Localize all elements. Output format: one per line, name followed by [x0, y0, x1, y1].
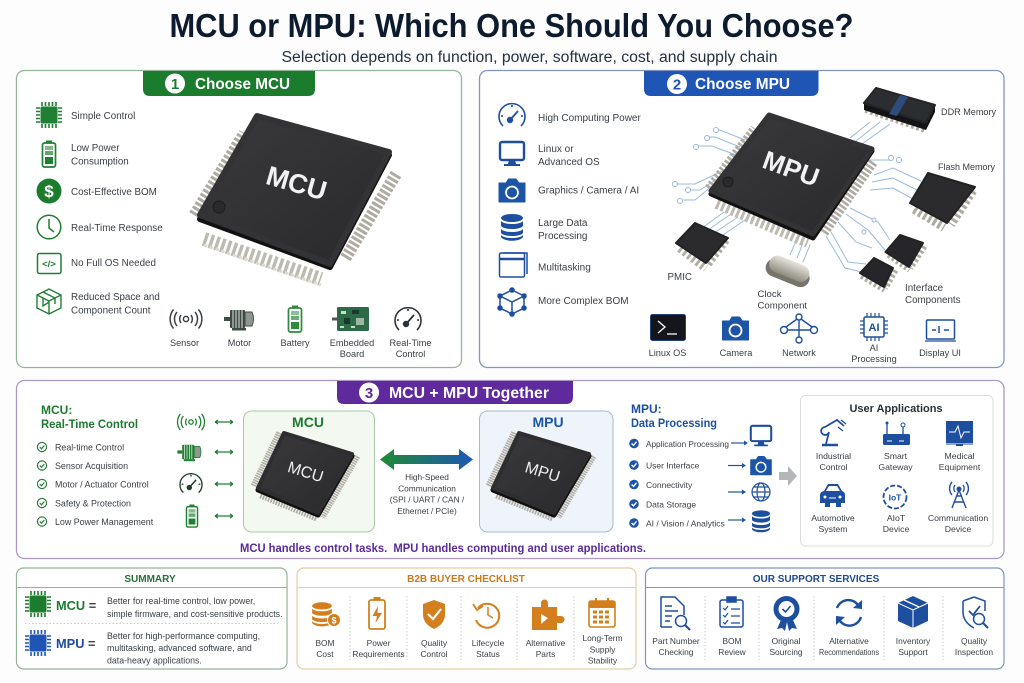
icon: original sourcing badge: [774, 596, 800, 631]
label: power requirements: Power: [367, 638, 391, 648]
label: AI processing: AI: [870, 343, 878, 353]
list: MPU tasks: Application Processing: [646, 439, 729, 449]
list: MCU tasks: Real-time Control: [55, 442, 124, 452]
text: more complex BOM: More Complex BOM: [538, 296, 629, 307]
text: large data processing: Processing: [538, 231, 587, 242]
label: flash memory: Flash Memory: [938, 162, 996, 172]
text: reduced space: Component Count: [71, 305, 151, 316]
text: large data processing: Large Data: [538, 218, 588, 229]
label: automotive system: System: [819, 524, 847, 534]
icon: database: [501, 214, 523, 241]
heading: user applications: User Applications: [849, 403, 943, 415]
panel: B2B buyer checklist: [297, 568, 636, 669]
icon: alternative parts puzzle: [532, 600, 564, 630]
chip: PMIC: [676, 223, 728, 268]
label: communication device: Device: [945, 524, 971, 534]
label: MCU equals: MCU =: [56, 598, 96, 613]
panel: summary: [16, 568, 287, 669]
chip: flash memory: [910, 173, 975, 226]
icon: network: [780, 314, 818, 343]
heading tab: together: MCU + MPU Together: [389, 385, 549, 402]
list: MCU tasks: Motor / Actuator Control: [55, 480, 149, 490]
chip: interface A: [886, 235, 924, 269]
icon: dollar: [36, 178, 62, 204]
label: AIoT device: AIoT: [887, 513, 906, 523]
icon: AI chip: [860, 313, 888, 341]
text: low power consumption: Consumption: [71, 156, 129, 167]
arrow: to applications: [779, 466, 797, 486]
icon row: MCU uses: [170, 306, 432, 359]
label: AI processing: Processing: [851, 354, 897, 364]
list: MPU tasks: Data Storage: [646, 500, 696, 510]
label: real-time control: Control: [396, 349, 425, 359]
icon: AIoT device: IoT: [889, 492, 902, 502]
text: linux or advanced OS: Advanced OS: [538, 157, 600, 168]
label: inventory support: Support: [898, 647, 928, 657]
label: real-time control: Real-Time: [389, 338, 432, 348]
label: part number checking: Checking: [659, 647, 694, 657]
icon: linux terminal: [650, 314, 686, 340]
heading: summary: SUMMARY: [124, 574, 176, 585]
icon: BOM review: [720, 597, 743, 627]
icon: power requirements: [369, 597, 385, 629]
icon: simple control chip: [36, 102, 62, 128]
heading tab: choose MCU: [143, 71, 315, 96]
heading tab: together: [337, 381, 573, 404]
icon: embedded board: [332, 307, 369, 331]
label: quality control: Quality: [421, 638, 448, 648]
label: medical equipment: Equipment: [939, 462, 981, 472]
label: DDR memory: DDR Memory: [941, 107, 997, 117]
label: smart gateway: Gateway: [878, 462, 913, 472]
icon: camera: [499, 179, 525, 202]
label: embedded board: Board: [340, 349, 364, 359]
icon: medical equipment: [946, 421, 973, 446]
label: motor: Motor: [228, 338, 251, 348]
icon: lifecycle: [473, 604, 499, 628]
icon: alternative recommendations: [836, 600, 862, 626]
icon: gauge: [395, 308, 421, 330]
icon: automotive: [820, 484, 845, 507]
label: quality control: Control: [420, 649, 448, 659]
heading tab: choose MPU: 2: [673, 76, 681, 94]
text: high-speed communication: High-Speed: [405, 472, 449, 482]
icon: sensor: [170, 310, 202, 328]
label: BOM cost: Cost: [316, 649, 334, 659]
label: part number checking: Part Number: [652, 636, 700, 646]
icon: MPU chip: [25, 630, 51, 656]
chip: clock crystal: [763, 252, 814, 290]
icon: inventory box: [898, 596, 928, 628]
text: high-speed communication: (SPI / UART / CAN /: [390, 495, 465, 505]
icon: MCU chip: [25, 591, 51, 617]
list: MCU tasks: [37, 442, 154, 527]
text: MPU summary: data-heavy applications.: [107, 655, 202, 665]
text: MPU summary: Better for high-performance computing,: [107, 631, 260, 641]
subtitle: Selection depends on function, power, software, cost, and supply chain: [282, 49, 778, 66]
icon: display UI: [925, 320, 956, 341]
text: multitasking: Multitasking: [538, 262, 591, 274]
text: MPU summary: multitasking, advanced software, and: [107, 643, 252, 653]
list: MPU tasks: Connectivity: [646, 480, 693, 490]
chip: small MCU: MCU: [285, 459, 325, 486]
heading tab: together: 3: [365, 385, 373, 402]
label: BOM review: Review: [718, 647, 747, 657]
icon: motor: [224, 310, 254, 330]
text: real-time response: Real-Time Response: [71, 223, 163, 234]
label: MPU equals: MPU =: [56, 636, 95, 651]
label: camera: Camera: [720, 348, 753, 358]
heading tab: choose MCU: Choose MCU: [195, 76, 290, 93]
icon: high computing gauge: [499, 104, 525, 126]
label: battery: Battery: [280, 338, 310, 348]
label: alternative parts: Parts: [536, 649, 555, 659]
label: AIoT device: Device: [883, 524, 909, 534]
icon: smart gateway: [883, 422, 910, 445]
list: MCU tasks: Low Power Management: [55, 517, 154, 527]
label: long-term supply stability: Stability: [588, 656, 618, 666]
label: lifecycle status: Lifecycle: [472, 638, 505, 648]
label: linux OS: Linux OS: [649, 348, 686, 358]
box: user applications: [800, 396, 993, 546]
heading: MCU real-time control: Real-Time Control: [41, 417, 138, 431]
label: display UI: Display UI: [919, 348, 961, 358]
icon: communication tower: [950, 482, 968, 508]
text: simple control: Simple Control: [71, 111, 135, 122]
label: MCU: MCU: [292, 414, 324, 430]
panel: MCU + MPU together: [16, 380, 1004, 558]
icon: BOM cost: [312, 602, 340, 626]
label: clock component: Clock: [758, 289, 782, 300]
label: BOM review: BOM: [722, 636, 742, 646]
icon: AIoT device: [884, 486, 906, 508]
icon: supply calendar: [589, 598, 615, 627]
icon: BOM cost: $: [331, 616, 337, 626]
label: MPU: MPU: [532, 414, 564, 430]
icons: MPU outputs with arrows: [728, 426, 771, 532]
icon: part number checking: [661, 597, 690, 630]
chip: DDR memory: [864, 88, 935, 130]
label: interface components: Interface: [905, 283, 944, 294]
icon: AI chip: AI: [868, 322, 880, 334]
label: industrial control: Industrial: [816, 451, 851, 461]
list: MPU tasks: [629, 439, 729, 528]
icon: monitor: [500, 142, 524, 166]
caption: control vs computing: MCU handles control tasks. MPU handles computing and user applications.: [240, 541, 646, 555]
heading: MPU data processing: MPU:: [631, 402, 662, 416]
chip: interface B: [860, 258, 895, 289]
text: high-speed communication: Ethernet / PCIe): [397, 506, 457, 516]
icon: industrial robot: [821, 420, 846, 445]
label: communication device: Communication: [928, 513, 988, 523]
label: alternative parts: Alternative: [526, 638, 566, 648]
list: MPU tasks: User Interface: [646, 460, 700, 470]
icon: code: </>: [42, 259, 56, 270]
chip: MPU main: [708, 115, 873, 242]
heading tab: choose MPU: Choose MPU: [695, 76, 790, 93]
label: alternative recommendations: Alternative: [829, 636, 869, 646]
heading: MCU real-time control: MCU:: [41, 403, 72, 417]
label: PMIC: PMIC: [668, 272, 692, 283]
text: graphics camera AI: Graphics / Camera / AI: [538, 186, 639, 196]
icon: battery: [288, 306, 302, 332]
label: inventory support: Inventory: [896, 636, 931, 646]
panel: choose MCU: [16, 70, 462, 368]
text: high computing: High Computing Power: [538, 113, 641, 124]
text: MCU summary: simple firmware, and cost-sensitive products.: [107, 609, 283, 619]
icon: camera: [722, 317, 748, 340]
label: smart gateway: Smart: [884, 451, 908, 461]
icon: quality inspection: [963, 597, 988, 628]
icon: code: [38, 254, 61, 274]
label: sensor: Sensor: [170, 338, 199, 348]
text: high-speed communication: Communication: [398, 483, 456, 493]
text: linux or advanced OS: Linux or: [538, 144, 574, 155]
chip: small MPU: MPU: [523, 459, 562, 486]
text: reduced space: Reduced Space and: [71, 292, 160, 303]
icon: low power battery: [42, 140, 56, 167]
label: lifecycle status: Status: [476, 649, 500, 659]
box: MCU: [244, 411, 374, 532]
list: MCU tasks: Safety & Protection: [55, 498, 131, 508]
title: MCU or MPU: Which One Should You Choose?: [170, 8, 854, 45]
icon: multitasking windows: [500, 253, 527, 277]
heading: checklist: B2B BUYER CHECKLIST: [407, 574, 525, 585]
text: low power consumption: Low Power: [71, 143, 120, 154]
icon: cube: [37, 289, 61, 314]
label: long-term supply stability: Long-Term: [582, 633, 623, 643]
chip: MPU main: MPU: [759, 145, 823, 193]
panel: choose MPU: [480, 70, 1004, 368]
heading tab: choose MPU: [644, 71, 818, 96]
label: embedded board: Embedded: [330, 338, 374, 348]
icons: MCU peripherals with arrows: [177, 414, 233, 527]
arrow: high-speed link: [380, 449, 473, 470]
panel: our support services: [646, 568, 1004, 669]
label: original sourcing: Sourcing: [769, 647, 803, 657]
label: clock component: Component: [758, 300, 807, 312]
chip: MCU main: [194, 116, 396, 285]
list: MPU tasks: AI / Vision / Analytics: [646, 518, 725, 528]
label: industrial control: Control: [819, 462, 848, 472]
icon: clock: [37, 215, 61, 239]
label: quality inspection: Quality: [961, 636, 988, 646]
label: BOM cost: BOM: [315, 638, 335, 648]
list: MCU tasks: Sensor Acquisition: [55, 461, 128, 471]
label: power requirements: Requirements: [352, 649, 405, 659]
heading tab: choose MCU: 1: [171, 76, 179, 93]
box: MPU: [480, 411, 613, 532]
label: original sourcing: Original: [772, 636, 801, 646]
label: automotive system: Automotive: [811, 513, 855, 523]
chip: MCU main: MCU: [263, 160, 330, 206]
label: alternative recommendations: Recommendations: [819, 647, 879, 657]
label: interface components: Components: [905, 295, 961, 306]
label: medical equipment: Medical: [945, 451, 975, 461]
icon: quality shield: [423, 600, 445, 629]
text: cost-effective BOM: Cost-Effective BOM: [71, 187, 157, 198]
circuit traces: [672, 122, 921, 272]
icon: dollar: $: [44, 182, 54, 201]
icon: complex BOM cube: [498, 288, 526, 316]
label: long-term supply stability: Supply: [590, 644, 616, 654]
heading: MPU data processing: Data Processing: [631, 416, 717, 430]
text: no full OS: No Full OS Needed: [71, 258, 156, 269]
text: MCU summary: Better for real-time control, low power,: [107, 596, 255, 606]
heading: services: OUR SUPPORT SERVICES: [753, 574, 880, 585]
label: network: Network: [782, 348, 816, 358]
label: quality inspection: Inspection: [955, 647, 993, 657]
